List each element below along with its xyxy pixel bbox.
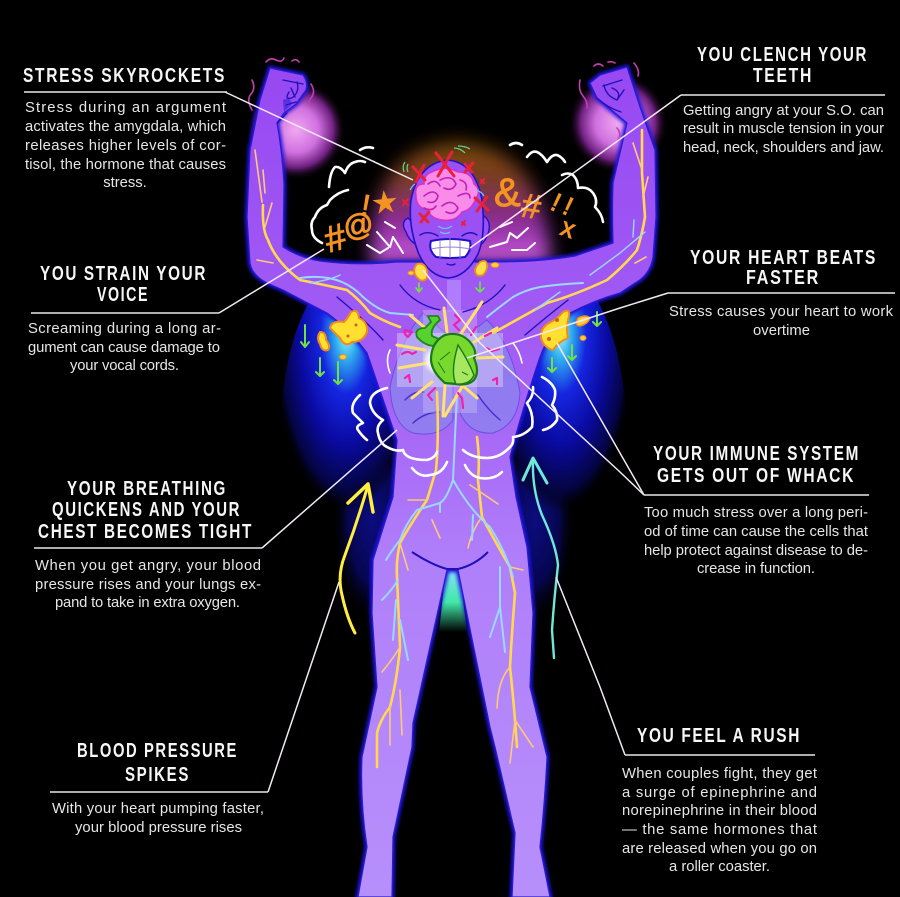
text: breathing body [35,558,261,611]
heading: breathing: CHEST BECOMES TIGHT [38,520,253,543]
text: blood pressure body [52,801,264,836]
text: immune body: Too much stress over a long peri- [644,505,868,521]
glow: right chest [483,268,627,612]
text: clench body: Getting angry at your S.O. can [683,103,884,119]
leader lines [219,92,681,792]
text: heart body [669,304,894,339]
glow: head [372,142,550,265]
text: rush body: — the same hormones that [622,822,817,838]
text: clench body: head, neck, shoulders and jaw. [683,140,884,156]
icon: breath clouds around chest [352,343,557,478]
swear symbols right: & [494,171,521,215]
swear symbols right: ! [547,187,566,217]
text: breathing body: When you get angry, your blood [35,558,261,574]
text: stress body: releases higher levels of cor- [25,138,226,154]
glow: right fist [568,73,668,173]
heading: strain voice: VOICE [97,283,149,306]
heart glow square [397,310,503,413]
icon: gland left neck [408,264,427,292]
icon: stress crosses [403,152,488,225]
heading: strain voice: YOU STRAIN YOUR [40,262,207,285]
head [403,146,489,278]
veins: yellow nerves [255,130,648,767]
heading: breathing: YOUR BREATHING [67,477,227,500]
text: blood pressure body: With your heart pumping faster, [52,801,264,817]
heading: heart beats faster [690,246,877,289]
icon: jagged shout lines [367,222,535,253]
swear symbols left [320,186,399,260]
icon: sweat ticks [403,146,484,234]
swear symbols right: x [557,211,580,244]
text: rush body: are released when you go on [622,841,817,857]
text: immune body: help protect against disease to de- [644,543,868,559]
heading: immune system [653,442,860,487]
callout: breathing [34,477,262,611]
heading: strain voice [40,262,207,306]
heading: breathing [38,477,253,543]
neck and collar lines [337,280,568,340]
icon: brain [416,168,479,220]
text: immune body [644,505,868,577]
heading: blood pressure: SPIKES [125,763,190,786]
icon: left fist details [277,80,303,123]
text: clench body [683,103,884,156]
text: immune body: crease in function. [697,561,815,577]
text: strain body: your vocal cords. [70,358,179,374]
swear symbols left: ★ [371,186,399,219]
callout: blood pressure [50,739,268,836]
icon: magenta stress marks [402,315,499,408]
icon: shake marks around fists [249,58,638,140]
callout: clench teeth [681,43,885,156]
heading: heart beats faster: FASTER [746,266,820,289]
text: stress body: tisol, the hormone that causes [25,157,226,173]
heading: stress skyrockets: STRESS SKYROCKETS [23,64,226,87]
glow: right chest lower [495,415,575,625]
swear symbols left: ! [359,189,373,223]
heading: blood pressure: BLOOD PRESSURE [77,739,238,762]
text: heart body: Stress causes your heart to work [669,304,894,320]
text: rush body: a roller coaster. [669,859,770,875]
text: stress body: stress. [103,175,147,191]
text: rush body: a surge of epinephrine and [622,785,817,801]
glow: left chest lower [332,415,412,625]
callout: immune system [644,442,869,577]
icon: right fist details [597,80,624,112]
callout: heart beats faster [668,246,895,339]
swear symbols right: # [519,187,543,227]
callout: feel a rush [622,724,817,875]
body silhouette [247,67,656,897]
glow: left chest [280,268,424,612]
icon: immune cells left [318,311,367,360]
text: stress body: Stress during an argument [25,100,226,116]
heading: clench teeth [697,43,868,87]
veins: blue nerves [300,220,645,660]
icon: gland right neck [475,261,499,292]
callout: strain voice [28,262,221,374]
swear symbols right [494,171,580,244]
text: strain body: Screaming during a long ar- [28,321,221,337]
glow: left fist [246,80,346,180]
swear symbols left: @ [340,206,377,245]
text: rush body: When couples fight, they get [622,766,817,782]
text: stress body [25,100,226,191]
swear symbols right: ! [559,191,578,221]
pubic line [412,552,488,569]
icon: anger clouds [311,143,603,243]
icon: green down arrows [301,312,601,384]
icon: immune cells right [541,311,590,350]
swear symbols left: # [320,215,351,260]
icon: cyan rising arrow [523,458,558,658]
text: immune body: od of time can cause the cells that [644,524,868,540]
icon: heart [416,316,477,384]
text: strain body [28,321,221,374]
text: blood pressure body: your blood pressure rises [75,820,242,836]
text: breathing body: pressure rises and your lungs ex- [35,577,261,593]
heading: clench teeth: TEETH [753,64,813,87]
callout: stress skyrockets [23,64,227,191]
text: strain body: gument can cause damage to [28,340,220,356]
heading: blood pressure [77,739,238,786]
text: stress body: activates the amygdala, which [25,119,226,135]
clenched teeth [430,238,470,258]
heading: feel a rush: YOU FEEL A RUSH [637,724,801,747]
text: breathing body: pand to take in extra oxygen. [55,595,240,611]
text: heart body: overtime [753,323,810,339]
text: clench body: result in muscle tension in your [683,121,884,137]
lungs [390,313,520,434]
icon: yellow rising arrow [340,484,373,633]
glow: crotch gap [439,566,467,632]
text: rush body: norepinephrine in their blood [622,803,817,819]
heading: breathing: QUICKENS AND YOUR [52,498,241,521]
icon: heart rays [397,302,503,416]
text: rush body [622,766,817,875]
